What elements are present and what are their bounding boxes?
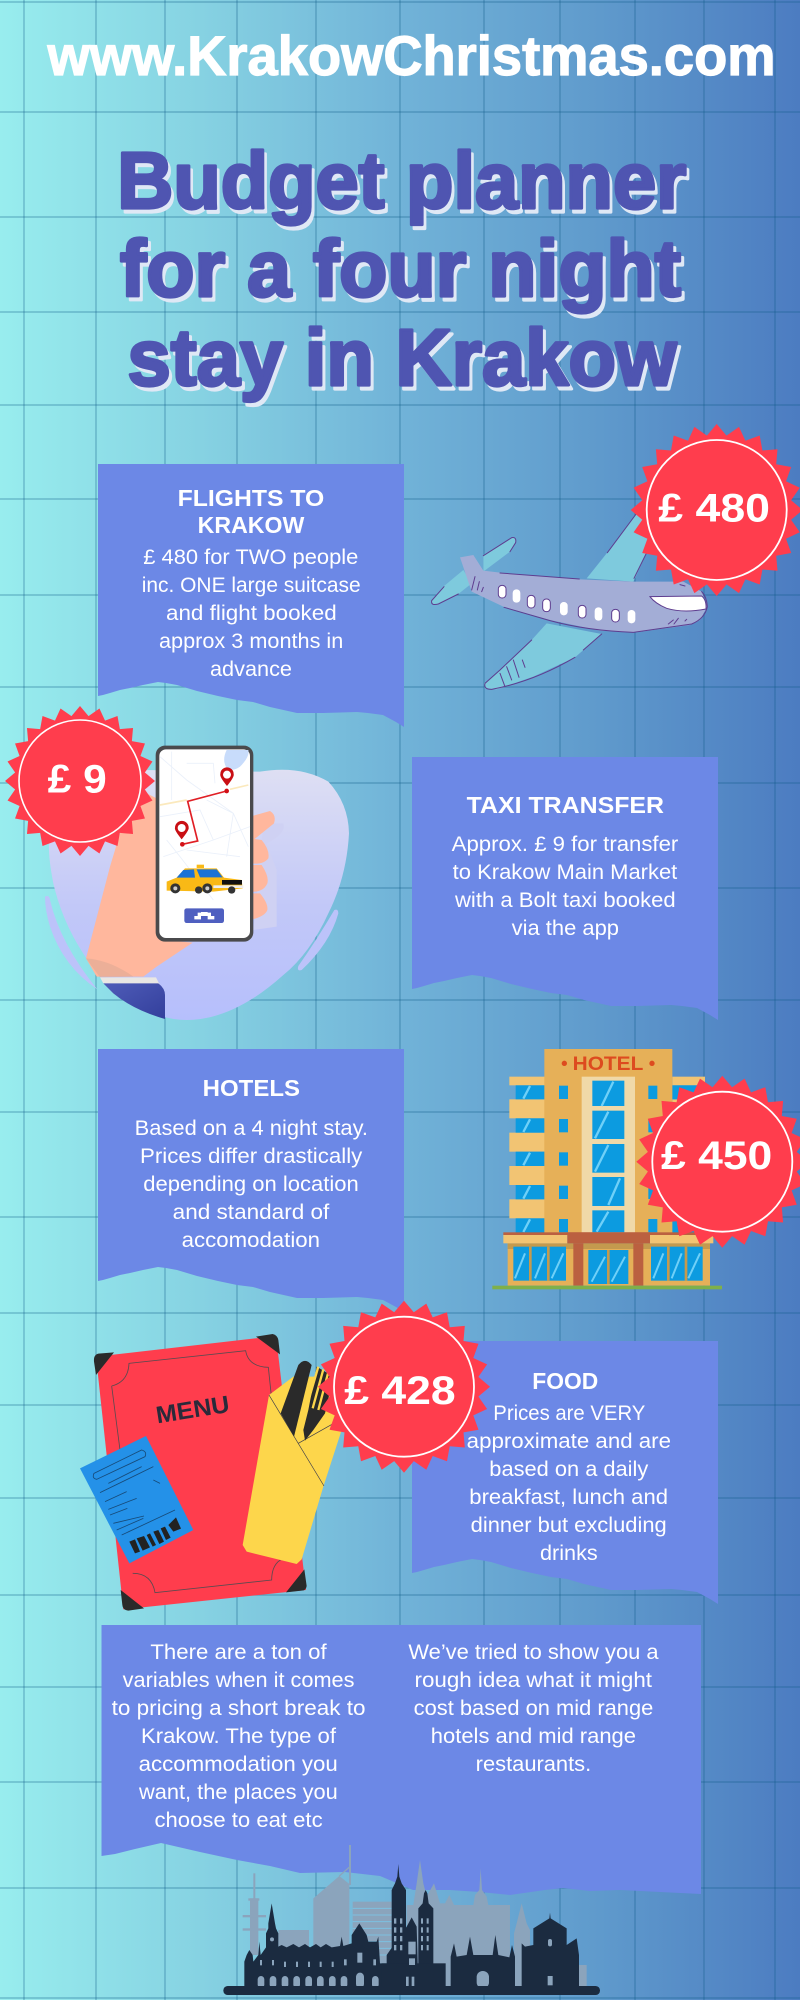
text: food: dinner but excluding (471, 1513, 667, 1537)
heading: taxi transfer: TAXI TRANSFER (467, 792, 664, 818)
panel: flights (98, 464, 404, 727)
text: right column: hotels and mid range (431, 1724, 636, 1748)
badge: 450 (636, 1076, 800, 1248)
heading: food: FOOD (532, 1368, 598, 1394)
blob backdrop (49, 770, 349, 1020)
text: food: based on a daily (489, 1457, 649, 1481)
text: left column: want, the places you (138, 1780, 338, 1804)
text: hotels: accomodation (182, 1228, 320, 1252)
panel: closing notes (102, 1625, 701, 1895)
badge: 9 (5, 706, 155, 856)
landmark silhouettes (244, 1864, 579, 1987)
panel: food (412, 1341, 718, 1604)
text: hotels: Based on a 4 night stay. (135, 1116, 368, 1140)
receipt (80, 1436, 193, 1563)
illustration: menu, receipt and cutlery (80, 1334, 342, 1611)
heading: flights: FLIGHTS TO (178, 485, 324, 511)
heading: flights (178, 485, 324, 538)
text: food: breakfast, lunch and (469, 1485, 668, 1509)
title (117, 136, 689, 406)
menu book (96, 1336, 306, 1609)
text: flights: advance (210, 657, 292, 681)
phone (156, 746, 253, 942)
badge: 480 (631, 424, 800, 596)
text: food: approximate and are (467, 1429, 671, 1453)
title: Budget planner (117, 136, 686, 225)
text: flights: approx 3 months in (159, 629, 343, 653)
badge: 480: £ 480 (658, 487, 770, 531)
text: taxi transfer: via the app (512, 916, 619, 940)
text: taxi transfer: with a Bolt taxi booked (454, 888, 676, 912)
title: Budget planner (120, 140, 689, 229)
text: hotels: and standard of (173, 1200, 329, 1224)
badge: 450: £ 450 (661, 1134, 772, 1178)
text: flights (142, 545, 361, 681)
text: food (467, 1401, 671, 1565)
illustration: Krakow skyline (223, 1845, 600, 1995)
text: hotels: Prices differ drastically (140, 1144, 363, 1168)
heading: hotels: HOTELS (203, 1075, 300, 1101)
text: left column: variables when it comes (123, 1668, 354, 1692)
text: left column: There are a ton of (150, 1640, 327, 1664)
website url heading: www.KrakowChristmas.com (47, 24, 776, 87)
skyline base (223, 1986, 600, 1995)
hand (86, 793, 193, 977)
hotel sign: HOTEL (573, 1054, 644, 1075)
text: left column: choose to eat etc (154, 1808, 323, 1832)
panel: hotels (98, 1049, 404, 1312)
badge: 428 (318, 1301, 490, 1473)
text: taxi transfer: to Krakow Main Market (453, 860, 677, 884)
title: for a four night (123, 228, 684, 317)
text: right column (408, 1640, 659, 1776)
text: taxi transfer (452, 832, 678, 940)
distant buildings (243, 1845, 587, 1987)
text: left column: Krakow. The type of (141, 1724, 336, 1748)
title: stay in Krakow (128, 313, 677, 402)
text: food: Prices are VERY (493, 1401, 645, 1425)
illustration: hand holding phone with taxi app (45, 746, 349, 1020)
heading: flights: KRAKOW (198, 512, 305, 538)
text: food: drinks (540, 1541, 598, 1565)
text: left column (112, 1640, 366, 1832)
menu label: MENU (154, 1391, 231, 1429)
taxi (167, 865, 243, 894)
taxi button (184, 908, 224, 923)
napkin (243, 1377, 342, 1564)
text: right column: rough idea what it might (414, 1668, 652, 1692)
panel: taxi transfer (412, 757, 718, 1020)
title: for a four night (120, 224, 681, 313)
title: stay in Krakow (130, 317, 680, 406)
cuff and sleeve (100, 977, 159, 984)
icon: airplane (431, 513, 707, 689)
text: hotels (135, 1116, 368, 1252)
text: right column: restaurants. (476, 1752, 591, 1776)
ground floor (508, 1243, 710, 1286)
illustration: hotel building (492, 1049, 722, 1289)
side wings (509, 1077, 705, 1218)
tower core (544, 1049, 672, 1233)
text: hotels: depending on location (143, 1172, 359, 1196)
knife and fork (281, 1361, 312, 1437)
text: flights: and flight booked (166, 601, 337, 625)
text: taxi transfer: Approx. £ 9 for transfer (452, 832, 678, 856)
badge: 428: £ 428 (344, 1369, 456, 1413)
text: flights: £ 480 for TWO people (143, 545, 358, 569)
badge: 9: £ 9 (48, 758, 107, 802)
text: left column: accommodation you (139, 1752, 338, 1776)
windows and arches (258, 1918, 553, 1988)
text: right column: We’ve tried to show you a (408, 1640, 659, 1664)
text: flights: inc. ONE large suitcase (142, 573, 361, 597)
text: left column: to pricing a short break to (112, 1696, 366, 1720)
text: right column: cost based on mid range (414, 1696, 653, 1720)
